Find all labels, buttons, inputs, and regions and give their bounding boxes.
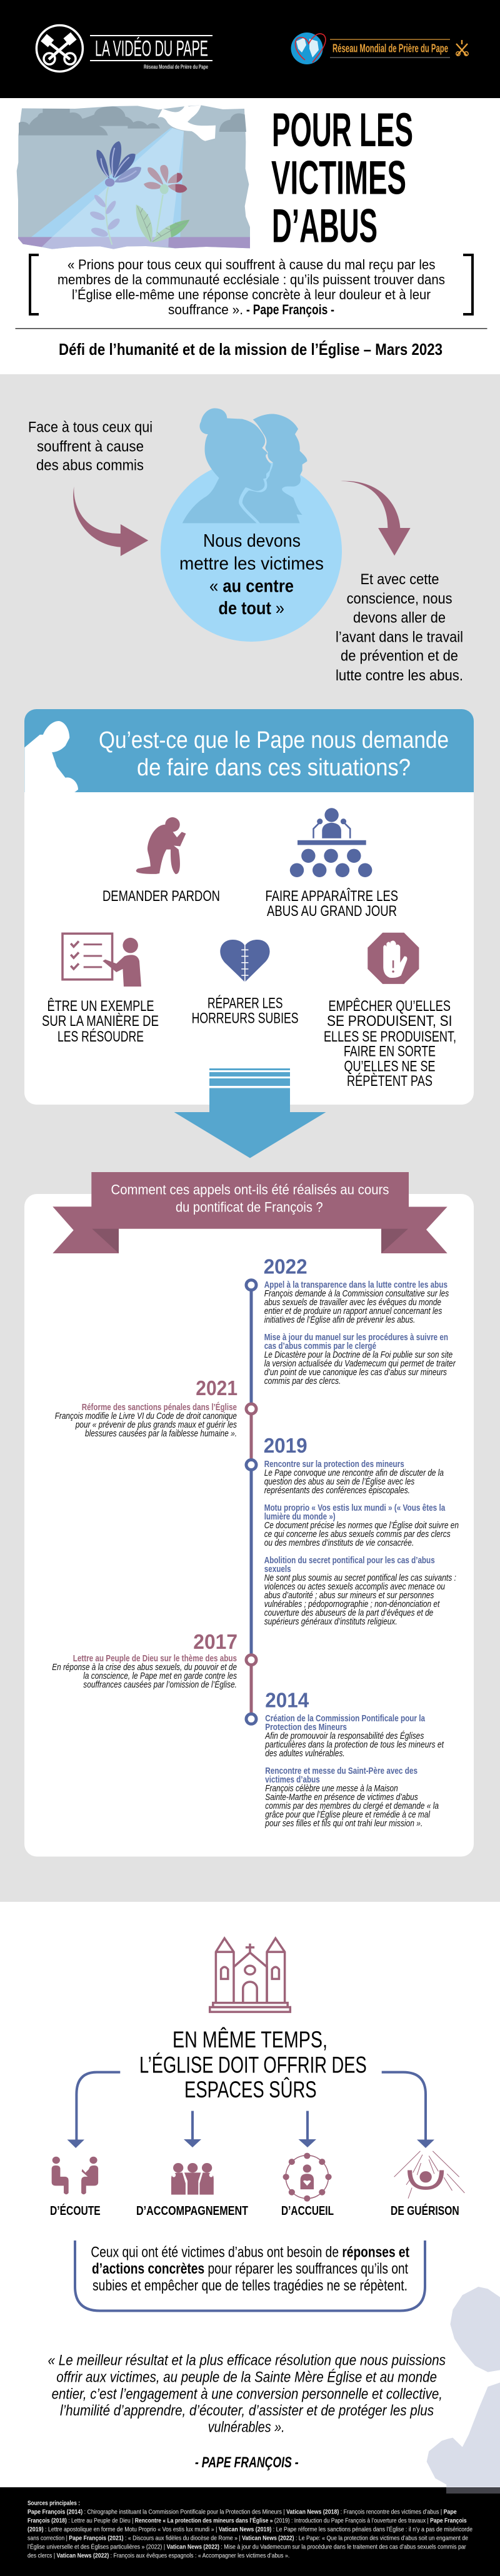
label: SUR LA MANIÈRE DE [42, 1013, 159, 1030]
timeline: 2022: Le Dicastère pour la Doctrine de la Foi publie sur son site [264, 1350, 452, 1360]
sources: (2019) : Lettre apostolique en forme de Motu Proprio « Vos estis lux mundi » | Vatican News (2019) : Le Pape réforme les sanctions pénales dans l’Église : il n’y a pas de miséricorde [28, 2525, 472, 2533]
timeline axis [246, 1280, 256, 1724]
closing quote: - PAPE FRANÇOIS - [195, 2454, 299, 2471]
label: QU’ELLES NE SE [344, 1058, 435, 1075]
quote with brackets [30, 255, 472, 317]
timeline: 2022 [264, 1255, 456, 1386]
subtitle: Défi de l’humanité et de la mission de l’Église – Mars 2023 [59, 340, 442, 359]
icon: stitched heart [220, 940, 270, 982]
icon: stop hand [368, 933, 419, 984]
text: right conclusion: lutte contre les abus. [336, 667, 463, 684]
arrow: to écoute [68, 2072, 120, 2148]
grey background band [0, 374, 500, 1902]
closing quote: l’humilité d’apprendre, d’écouter, d’assister et de protéger les plus [60, 2402, 434, 2419]
title: D’ABUS [272, 200, 378, 252]
heading [139, 2027, 367, 2102]
sources: des clercs | Vatican News (2022) : François aux évêques espagnols : « Accompagner les victimes d’abus ». [28, 2552, 289, 2559]
quote with brackets: l’Église elle-même une réponse concrète à leur douleur et à leur [72, 287, 431, 302]
illustration: dove and flowers [17, 103, 250, 249]
text: centre message: « au centre [209, 576, 294, 596]
heading: ESPACES SÛRS [184, 2077, 317, 2102]
closing quote: « Le meilleur résultat et la plus efficace résolution que nous puissions [48, 2352, 446, 2369]
arrow: to accueil [299, 2111, 316, 2147]
timeline: 2014: Protection des Mineurs [265, 1723, 347, 1733]
closing quote: vulnérables ». [208, 2419, 285, 2436]
timeline: 2019: supérieurs généraux d’instituts religieux. [264, 1617, 398, 1627]
arrow: left curved [73, 486, 148, 556]
quote with brackets: « Prions pour tous ceux qui souffrent à cause du mal reçu par les [68, 257, 435, 272]
logo wordmark [90, 35, 212, 70]
text: left intro: Face à tous ceux qui [28, 419, 152, 436]
timeline: 2014: victimes d’abus [265, 1775, 320, 1785]
arrow: to guérison [382, 2072, 434, 2148]
timeline: 2021 [55, 1376, 238, 1439]
arrow: big blue down [174, 1068, 326, 1158]
logo wordmark: Réseau Mondial de Prière du Pape [144, 64, 208, 70]
callout box: subies et empêcher que de telles tragédies ne se répètent. [92, 2277, 408, 2294]
timeline: 2019: violences ou actes sexuels accomplis avec menace ou [264, 1582, 445, 1592]
icon: pope silhouette [24, 721, 78, 798]
ribbon banner: du pontificat de François ? [176, 1200, 323, 1215]
callout box [75, 2240, 425, 2310]
text: centre message: Nous devons [203, 531, 301, 551]
timeline: 2014: François célèbre une messe à la Maison [265, 1784, 398, 1794]
label: D’ACCUEIL [281, 2204, 334, 2218]
timeline: 2014: Sainte-Marthe en présence de victimes d’abus [265, 1793, 418, 1803]
timeline: 2022: Appel à la transparence dans la lutte contre les abus [264, 1280, 448, 1290]
closing quote: offrir aux victimes, au peuple de la Sainte Mère Église et au monde [56, 2369, 437, 2386]
label [192, 995, 299, 1027]
circle [161, 460, 342, 642]
logo: La Vidéo du Pape keys [36, 25, 82, 71]
timeline: 2014: 2014 [265, 1688, 309, 1711]
sources [28, 2499, 472, 2559]
timeline: 2019: couverture des abuseurs de la part d’évêques et de [264, 1608, 433, 1618]
timeline: 2019: question des abus au sein de l’Église avec les [264, 1476, 414, 1487]
timeline: 2014: des adultes vulnérables. [265, 1749, 345, 1759]
heading: de faire dans ces situations? [137, 755, 411, 781]
text: right conclusion: devons aller de [353, 610, 446, 627]
label: DEMANDER PARDON [102, 888, 220, 905]
header band [0, 0, 500, 98]
label: D’ÉCOUTE [50, 2204, 101, 2218]
timeline: 2014 [264, 1688, 444, 1829]
panel header band [24, 709, 474, 792]
text: centre message [179, 531, 324, 619]
icon: accompaniment [171, 2163, 214, 2195]
heading: EN MÊME TEMPS, [172, 2027, 328, 2052]
Réseau Mondial wordmark [330, 39, 468, 58]
callout box: Ceux qui ont été victimes d’abus ont besoin de réponses et [91, 2244, 409, 2260]
label: FAIRE APPARAÎTRE LES [265, 888, 398, 905]
label: SE PRODUISENT, SI [327, 1013, 452, 1030]
timeline: 2019: ce qui concerne les abus sexuels commis par des clercs [264, 1529, 451, 1539]
text: centre message: mettre les victimes [179, 554, 324, 574]
timeline: 2019: Rencontre sur la protection des mineurs [264, 1460, 404, 1470]
timeline: 2019: Ce document précise les normes que l’Église doit suivre en [264, 1520, 459, 1531]
timeline: 2017: 2017 [193, 1630, 238, 1653]
timeline: 2022: entier et de produire un rapport annuel concernant les [264, 1306, 442, 1316]
timeline: 2021: blessures causées par la faiblesse humaine ». [85, 1429, 237, 1439]
label: D’ACCOMPAGNEMENT [136, 2204, 248, 2218]
timeline: 2014: commis par des membres du clergé et demande « la [265, 1801, 439, 1811]
timeline: 2017 [52, 1630, 238, 1690]
timeline: 2019: Le Pape convoque une rencontre afin de discuter de la [264, 1468, 444, 1478]
timeline: 2022: 2022 [264, 1255, 308, 1278]
logo wordmark: LA VIDÉO DU PAPE [95, 36, 208, 61]
panel: what the Pope asks [24, 709, 474, 1105]
text: right conclusion: Et avec cette [360, 571, 439, 588]
text: left intro [28, 419, 152, 474]
timeline: 2014: Afin de promouvoir la responsabilité des Églises [264, 1731, 424, 1741]
icon: kneeling man [136, 817, 186, 874]
text: right conclusion: de prévention et de [341, 648, 458, 665]
timeline: 2021: Réforme des sanctions pénales dans l’Église [82, 1402, 237, 1413]
text: right conclusion: conscience, nous [347, 590, 452, 607]
closing quote: entier, c’est l’engagement à une conversion personnelle et collective, [52, 2385, 442, 2402]
sources: Pape François (2014) : Chirographe instituant la Commission Pontificale pour la Protection des Mineurs | Vatican News (2018) : François rencontre des victimes d’abus | Pape [28, 2508, 457, 2515]
label: HORREURS SUBIES [192, 1010, 299, 1027]
pope silhouette [427, 2287, 500, 2494]
footer band [0, 2487, 500, 2576]
title [271, 104, 413, 252]
sources: l’Église universelle et des Églises particulières » (2022) | Vatican News (2022) : Mise à jour du Vademecum sur la procédure dans le traitement des cas d’abus sexuels commis par [28, 2542, 466, 2550]
icon: church [210, 1938, 290, 2012]
timeline: 2019: 2019 [264, 1434, 308, 1457]
arrow: to accompagnement [184, 2111, 201, 2147]
timeline: 2019 [264, 1434, 459, 1627]
sources: sans correction | Pape François (2021) : « Discours aux fidèles du diocèse de Rome » | Vatican News (2022) : Le Pape: « Que la protection des victimes d’abus soit un engament de [28, 2534, 468, 2542]
timeline: 2022: la version actualisée du Vademecum qui permet de traiter [264, 1359, 456, 1369]
text: left intro: souffrent à cause [37, 439, 144, 455]
quote with brackets: membres de la communauté ecclésiale : qu’ils puissent trouver dans [58, 272, 445, 287]
timeline: 2022: initiatives de l’Église afin de prévenir les abus. [264, 1315, 415, 1325]
label: LES RÉSOUDRE [58, 1028, 144, 1045]
label: ABUS AU GRAND JOUR [267, 903, 397, 920]
panel: victims at the centre [28, 408, 463, 684]
timeline: 2022: François demande à la Commission consultative sur les [264, 1289, 449, 1299]
timeline: 2019: vulnérables ; pédopornographie ; non-dénonciation et [264, 1599, 440, 1609]
sources: François (2018) : Lettre au Peuple de Dieu | Rencontre « La protection des mineurs dans l’Église » (2019) : Introduction du Pape François à l’ouverture des travaux | Pape François [28, 2516, 467, 2524]
timeline: 2022: Mise à jour du manuel sur les procédures à suivre en [264, 1333, 448, 1343]
ribbon banner [52, 1172, 448, 1253]
text: centre message: de tout » [219, 599, 284, 619]
timeline: 2022: d’un point de vue canonique les cas d’abus sur mineurs [264, 1368, 447, 1378]
label [324, 998, 456, 1090]
text: right conclusion: l’avant dans le travail [336, 629, 463, 645]
timeline: 2019: Motu proprio « Vos estis lux mundi » (« Vous êtes la [264, 1503, 446, 1513]
timeline: 2021: 2021 [196, 1376, 238, 1400]
icon: two silhouettes [182, 408, 307, 523]
icon: checklist teacher [62, 933, 141, 987]
icon: healing figure [394, 2151, 464, 2199]
ribbon banner: Comment ces appels ont-ils été réalisés au cours [111, 1182, 389, 1198]
label: ELLES SE PRODUISENT, [324, 1028, 456, 1045]
label: EMPÊCHER QU’ELLES [329, 998, 451, 1015]
logo: Réseau Mondial globe [291, 32, 326, 64]
timeline: 2014: particulières dans la protection de tous les mineurs et [264, 1740, 444, 1750]
icon: podium and audience [290, 808, 372, 877]
quote with brackets: souffrance ». [168, 302, 243, 317]
timeline: 2022: commis par des clercs. [264, 1376, 341, 1386]
timeline: 2019: ou des membres d’instituts de vie consacrée. [264, 1538, 414, 1548]
timeline: 2019: Abolition du secret pontifical pour les cas d’abus [264, 1556, 435, 1566]
label: RÉPÈTENT PAS [347, 1073, 432, 1090]
icon: welcome circle [283, 2153, 332, 2202]
section: safe spaces [50, 1938, 464, 2310]
closing quote [48, 2352, 446, 2471]
timeline: 2022: abus sexuels de travailler avec les évêques du monde [264, 1298, 441, 1308]
title: VICTIMES [271, 151, 406, 205]
panel: timeline [24, 1172, 474, 1857]
timeline: 2017: En réponse à la crise des abus sexuels, du pouvoir et de [52, 1663, 237, 1673]
heading: Qu’est-ce que le Pape nous demande [99, 727, 449, 753]
heading: L’ÉGLISE DOIT OFFRIR DES [139, 2052, 367, 2077]
label [42, 998, 159, 1045]
timeline: 2014: Création de la Commission Pontificale pour la [265, 1714, 426, 1724]
timeline: 2017: souffrances causées par l’omission de l’Église. [83, 1679, 237, 1690]
label: DE GUÉRISON [391, 2204, 459, 2218]
timeline: 2019: représentants des conférences épiscopales. [264, 1486, 410, 1496]
timeline: 2022: cas d’abus commis par le clergé [264, 1341, 376, 1351]
arrow: right curved [341, 481, 411, 555]
timeline: 2017: Lettre au Peuple de Dieu sur le thème des abus [73, 1654, 237, 1664]
label [265, 888, 398, 920]
quote with brackets: - Pape François - [246, 302, 334, 317]
timeline: 2021: pour « prévenir de plus grands maux et guérir les [75, 1420, 237, 1430]
callout box: d’actions concrètes pour réparer les souffrances qu’ils ont [92, 2260, 408, 2277]
timeline: 2019: Ne sont plus soumis au secret pontifical les cas suivants : [264, 1573, 456, 1583]
label: ÊTRE UN EXEMPLE [48, 998, 154, 1015]
timeline: 2019: lumière du monde ») [264, 1512, 336, 1522]
timeline: 2014: Rencontre et messe du Saint-Père avec des [265, 1766, 418, 1776]
text: right conclusion [336, 571, 463, 684]
timeline: 2021: François modifie le Livre VI du Code de droit canonique [55, 1411, 237, 1421]
icon: listening [52, 2157, 98, 2194]
sources: Sources principales : [28, 2499, 80, 2507]
timeline: 2014: grâce pour que l’Église pleure et remédie à ce mal [265, 1809, 431, 1820]
text: left intro: des abus commis [36, 457, 144, 474]
timeline: 2019: sexuels [264, 1564, 291, 1574]
timeline: 2017: la conscience, le Pape met en garde contre les [83, 1671, 237, 1681]
label: RÉPARER LES [208, 995, 282, 1012]
label: FAIRE EN SORTE [344, 1043, 436, 1060]
heading [99, 727, 449, 781]
timeline: 2014: pour ses filles et fils qui ont trahi leur mission ». [264, 1819, 422, 1829]
timeline: 2019: abus d’autorité ; abus sur mineurs et sur personnes [264, 1591, 434, 1601]
